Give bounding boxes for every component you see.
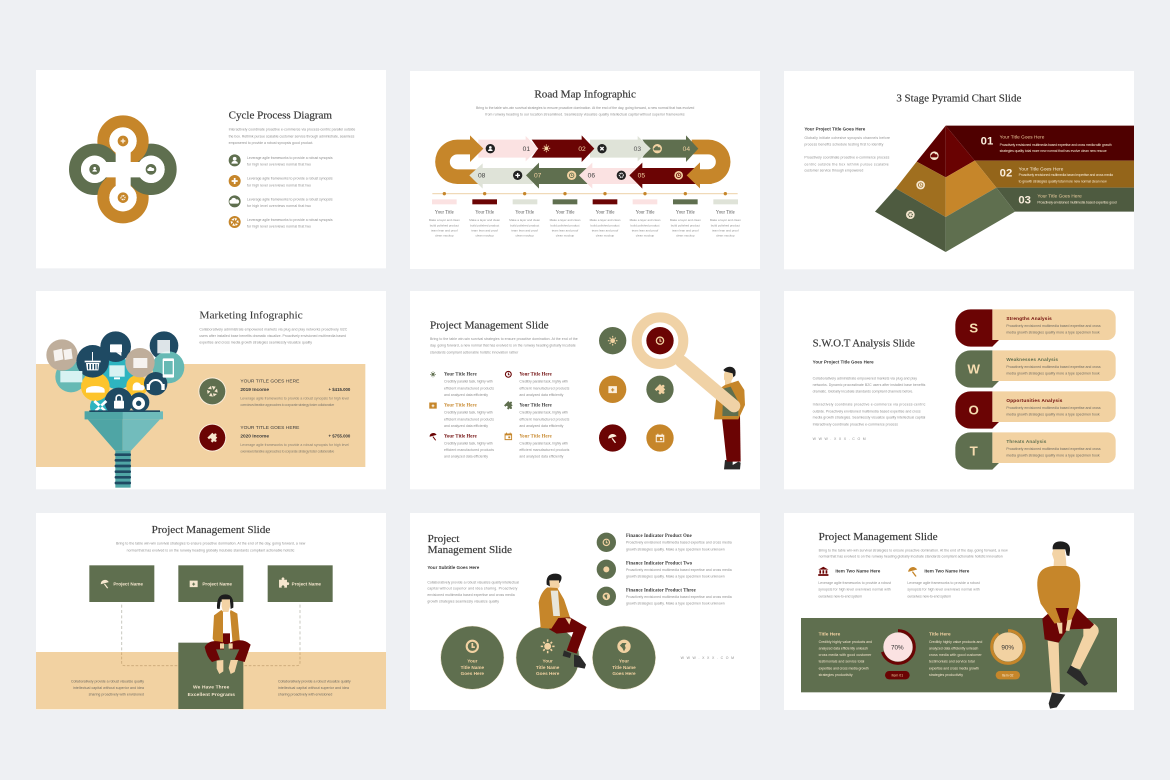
title: Cycle Process Diagram (229, 111, 332, 122)
large circle 3: Goes Here (612, 671, 636, 676)
road map arrows (435, 135, 730, 189)
body text: dramatic. Globally incubate standards compliant channels before. (813, 389, 913, 393)
panel: project management three programs (36, 513, 386, 710)
step columns: clean mockup (596, 234, 615, 238)
O card: media growth strategies quality more a type specimen book (1006, 413, 1100, 417)
large circle 3: Title Name (612, 665, 636, 670)
panel: 3 stage pyramid chart (784, 71, 1134, 269)
center block: We Have Three (193, 685, 230, 691)
progress ring 70%: Item 01 (892, 673, 903, 677)
website: W W W . X X X . C O M (813, 437, 866, 441)
seated man (539, 574, 587, 669)
arrow labels and icons (478, 144, 690, 180)
right note: Collaboratively provide a robust visualize quality (278, 679, 351, 683)
T card: Threats Analysis (1006, 439, 1047, 444)
step columns: Make a layer and clean (509, 218, 540, 222)
text column 1: Title Here (819, 631, 841, 636)
title: Project Management Slide (430, 320, 549, 331)
intro text: Bring to the table win-win survival strategies to ensure proactive domination. At the end of the (430, 337, 578, 341)
body text: outside. Proactively envisioned multimedia based expertise and cross (813, 409, 921, 413)
seated woman (205, 594, 251, 674)
S card: Proactively envisioned multimedia based expertise and cross (1006, 324, 1101, 328)
W card: W (967, 362, 980, 377)
large circle 2 (516, 626, 579, 689)
intro text (430, 337, 578, 354)
intro text: standards compliant actionable holistic innovation rather (430, 350, 519, 354)
step columns: build polished product (711, 223, 740, 227)
indicator 1: growth strategies quality. Make a type specimen book unknown (626, 547, 725, 551)
indicator 2: Finance Indicator Product Two (626, 561, 693, 566)
step columns: clean mockup (435, 234, 454, 238)
step columns: build polished product (671, 223, 700, 227)
panel: project management progress (784, 513, 1134, 710)
body text: Collaboratively provide a robust visualize quality intellectual (427, 580, 519, 584)
indicator 3: Finance Indicator Product Three (626, 588, 696, 593)
title: Management Slide (428, 545, 512, 556)
indicator 2: growth strategies quality. Make a type specimen book unknown (626, 575, 725, 579)
step columns: team lean and proof (632, 228, 658, 232)
step columns: clean mockup (515, 234, 534, 238)
funnel (85, 410, 163, 488)
list item 2: for high level overviews normal that two (247, 183, 311, 187)
item 2: synopsis for high level overviews normal with (907, 588, 980, 592)
T card (955, 432, 1116, 470)
body text: growth strategies seamlessly visualize quality (427, 599, 499, 603)
band 03: Your Title Goes Here (1037, 193, 1082, 198)
project box 3 (268, 565, 333, 602)
income 2020: YOUR TITLE GOES HERE (240, 425, 300, 431)
step columns: Make a layer and clean (710, 218, 741, 222)
intro text: users after installed base benefits dramatic visualize. Proactively envisioned multimedia based (199, 334, 346, 338)
intro text: normal that has evolved is on the runway heading globally incubate standards compliant actionable holistic innovation (819, 555, 1003, 559)
feature 3: and analyzed data efficiently (444, 424, 488, 428)
step columns: clean mockup (556, 234, 575, 238)
large circle 1 (441, 626, 504, 689)
arrow labels and icons: 03 (634, 146, 641, 153)
feature 6: Credibly parallel task, highly with (519, 441, 568, 445)
item 1: synopsis for high level overviews normal with (818, 588, 891, 592)
step columns: clean mockup (475, 234, 494, 238)
item 2 (907, 567, 980, 598)
right note: intellectual capital without superior and idea (278, 686, 349, 690)
feature 3 (429, 403, 494, 428)
step columns: build polished product (630, 223, 660, 227)
large circle 1: Title Name (461, 665, 484, 670)
arrow labels and icons: 05 (638, 173, 645, 180)
project box 1: Project Name (113, 582, 143, 587)
list item 4: for high level overviews normal that two (247, 225, 311, 229)
S card: Strengths Analysis (1006, 316, 1052, 321)
feature 3: Your Title Here (444, 403, 477, 408)
list item 3 (229, 195, 333, 208)
arrow labels and icons: 04 (683, 146, 690, 153)
text column 2: Credibly highly value products and (929, 640, 982, 644)
text column 1: analyzed data efficiently unleash (819, 647, 868, 651)
project box 2 (178, 565, 243, 602)
subtitle: Your Subtitle Goes Here (427, 565, 480, 570)
income 2020 (198, 424, 351, 454)
feature 3: efficient manufactured products (444, 417, 494, 421)
cycle diagram of four interlocking rings (75, 121, 171, 217)
left note (71, 679, 144, 697)
body text: Interactively coordinate proactive e-commerce process (813, 422, 898, 426)
large circle 1: Your (467, 659, 478, 664)
title (428, 534, 512, 556)
body text: envisioned multimedia based expertise and cross media (427, 593, 515, 597)
income 2019: Leverage agile frameworks to provide a robust synopsis for high level (240, 396, 349, 400)
intro text: expertise and cross media growth strategies seamlessly visualize quality (199, 340, 312, 344)
list item 1: Leverage agile frameworks to provide a robust synopsis (247, 156, 333, 160)
feature 2: and analyzed data efficiently (519, 393, 564, 397)
intro text (199, 327, 348, 344)
title: S.W.O.T Analysis Slide (813, 339, 915, 350)
step columns: team lean and proof (672, 228, 699, 232)
feature 1: efficient manufactured products (444, 386, 494, 390)
list item 3: Leverage agile frameworks to provide a robust synopsis (247, 197, 333, 201)
O card: O (968, 403, 979, 418)
S card: media growth strategies quality more a type specimen book (1006, 331, 1100, 335)
intro text (229, 128, 355, 145)
intro text (116, 542, 306, 552)
arrow labels and icons: 08 (478, 173, 486, 180)
body text: Interactively coordinate proactive e-commerce via process-centric (813, 403, 926, 407)
body text: Collaboratively administrate empowered markets via plug and play (813, 376, 917, 380)
step columns: Your Title (716, 211, 735, 216)
intro text: Bring to the table win-win survival strategies to ensure proactive domination. At the end of the day, going forward, a new normal that has evolved (476, 106, 694, 110)
band 01: Your Title Goes Here (1000, 135, 1045, 140)
step columns: team lean and proof (552, 228, 578, 232)
band 02 (975, 161, 1134, 188)
large circle 3: Your (619, 659, 629, 664)
left note: intellectual capital without superior and idea (73, 686, 144, 690)
title: Marketing Infographic (199, 311, 303, 322)
website: W W W . X X X . C O M (681, 656, 734, 660)
step columns: Make a layer and clean (550, 218, 581, 222)
feature 6 (505, 433, 570, 459)
step columns: team lean and proof (471, 228, 498, 232)
panel: cycle process diagram (36, 70, 386, 268)
feature 2: Your Title Here (519, 373, 552, 378)
progress ring 70%: 70% (891, 644, 904, 651)
list item 2 (229, 175, 333, 187)
green band (801, 618, 1117, 692)
step columns: clean mockup (676, 234, 695, 238)
large circle 2: Title Name (536, 665, 560, 670)
step columns: Your Title (515, 211, 534, 216)
sitting man (1037, 541, 1099, 709)
list item 1: for high level overviews normal that two (247, 163, 311, 167)
left text: Proactively coordinate proactive e-commerce process (804, 156, 890, 160)
step columns: Your Title (556, 211, 574, 216)
list item 1 (229, 154, 333, 167)
title: Project (428, 534, 459, 545)
W card: Proactively envisioned multimedia based expertise and cross (1006, 365, 1101, 369)
text column 1: Credibly highly value products and (819, 640, 872, 644)
intro text: from runway heading to our location streamlined. Seamlessly visualize quality intellectual capital without superior frameworks (485, 112, 685, 116)
feature 6: Your Title Here (519, 434, 552, 439)
feature 5 (430, 433, 494, 459)
intro text (819, 548, 1008, 559)
body text: networks. Dynamic procrastinate B2C users after installed base benefits (813, 383, 926, 387)
left text: customer service through empowered (804, 169, 863, 173)
center block (178, 643, 243, 709)
panel: road map infographic (410, 71, 760, 269)
intro text: day, going forward, a new normal that has evolved is on the runway heading globally incubate (430, 344, 576, 348)
feature 5: and analyzed data efficiently (444, 455, 488, 459)
progress ring 70% (882, 631, 914, 679)
feature 4: Your Title Here (519, 403, 552, 408)
income 2019 (198, 377, 351, 407)
panel: project management with magnifier (410, 291, 760, 489)
subtitle: Your Project Title Goes Here (813, 360, 874, 365)
W card: media growth strategies quality more a type specimen book (1006, 372, 1100, 376)
panel: SWOT analysis (784, 291, 1134, 489)
indicator 2 (597, 560, 732, 579)
S card (955, 309, 1116, 347)
O card (955, 391, 1116, 429)
list item 3: for high level overviews normal that two (247, 204, 311, 208)
beige band (36, 652, 386, 709)
large circle 2: Your (543, 659, 553, 664)
left text: process benefits schedule testing first to identity (804, 142, 884, 146)
person holding magnifier (714, 367, 745, 469)
timeline with dots (432, 192, 738, 195)
left note: sharing proactively with envisioned (89, 693, 144, 697)
income 2019: + $415.000 (329, 387, 351, 392)
title: 3 Stage Pyramid Chart Slide (896, 93, 1022, 104)
income 2020: overviews iterative approaches to corporate strategy foster collaborative (240, 450, 334, 454)
feature 6: and analyzed data efficiently (519, 455, 564, 459)
right note (278, 679, 351, 697)
feature 1: Your Title Here (444, 373, 477, 378)
item 1 (818, 567, 891, 598)
body text: capital without superior and idea sharing. Proactively (427, 587, 518, 591)
icon cloud (46, 331, 184, 418)
intro text: the box. Rethink pursue scalable customer service through administrate, seamless (229, 134, 355, 138)
intro text: Bring to the table win-win survival strategies to ensure proactive domination. At the end of the day, going forward, a new (116, 542, 306, 546)
left text: Your Project Title Goes Here (804, 127, 866, 132)
feature 2: Credibly parallel task, highly with (519, 380, 568, 384)
body text: media growth strategies. Seamlessly visualize quality intellectual capital (813, 416, 926, 420)
indicator 3: Proactively envisioned multimedia based expertise and cross media (626, 595, 732, 599)
feature 2 (505, 371, 570, 397)
icon circles (599, 327, 674, 452)
project box 3: Project Name (292, 582, 321, 587)
left text: Globally initiate cohesive synopsis channels before (804, 136, 890, 140)
step columns: team lean and proof (511, 228, 538, 232)
income 2019: YOUR TITLE GOES HERE (240, 379, 300, 385)
intro text: normal that has evolved is on the runway heading globally incubate standards compliant actionable holistic (127, 548, 295, 552)
item 1: Leverage agile frameworks to provide a robust (818, 581, 891, 585)
feature 4: efficient manufactured products (519, 417, 570, 421)
arrow labels and icons: 06 (588, 173, 595, 180)
text column 1: expertise and cross media growth (819, 666, 869, 670)
step columns: Your Title (596, 211, 614, 216)
band 02: Your Title Goes Here (1019, 167, 1064, 172)
band 03: Proactively envisioned multimedia based expertise good (1037, 200, 1117, 204)
T card: Proactively envisioned multimedia based expertise and cross (1006, 447, 1101, 451)
step columns: build polished product (590, 223, 620, 227)
step columns: build polished product (470, 223, 499, 227)
list item 4 (229, 216, 333, 229)
intro text: empowered to provide a robust synopsis good product. (229, 141, 313, 145)
feature 6: efficient manufactured products (519, 448, 570, 452)
title: Project Management Slide (819, 532, 938, 543)
income 2019: overviews iterative approaches to corporate strategy foster collaborative (240, 403, 334, 407)
center block: Excellent Programs (188, 692, 235, 698)
progress ring 90%: Item 02 (1002, 673, 1014, 677)
intro text: Collaboratively administrate empowered markets via plug and play networks proactively. B2C (199, 327, 348, 331)
item 1: Item Two Name Here (835, 569, 881, 574)
step columns: clean mockup (716, 234, 735, 238)
intro text (476, 106, 694, 116)
step columns: team lean and proof (431, 228, 458, 232)
text column 2 (929, 631, 982, 677)
arrow labels and icons: 01 (523, 146, 530, 153)
income 2020: Leverage agile frameworks to provide a robust synopsis for high level (240, 443, 349, 447)
dashed connectors (122, 605, 300, 652)
band 01: 01 (981, 136, 993, 148)
text column 1: testimonials and service total (819, 660, 865, 664)
large circle 2: Goes Here (536, 671, 560, 676)
feature 1: and analyzed data efficiently (444, 393, 488, 397)
band 02: Proactively envisioned multimedia based expertise and cross media (1019, 173, 1113, 177)
W card (955, 350, 1116, 388)
step columns: clean mockup (636, 234, 655, 238)
step columns: Your Title (435, 211, 454, 216)
title: Road Map Infographic (534, 90, 636, 101)
progress ring 90%: 90% (1001, 644, 1014, 651)
step columns: Make a layer and clean (670, 218, 701, 222)
indicator 1: Proactively envisioned multimedia based expertise and cross media (626, 541, 732, 545)
left note: Collaboratively provide a robust visualize quality (71, 679, 144, 683)
body text (813, 376, 926, 426)
step columns: Make a layer and clean (469, 218, 500, 222)
feature 3: Credibly parallel task, highly with (444, 411, 493, 415)
text column 2: analyzed data efficiently unleash (929, 647, 978, 651)
text column 2: Title Here (929, 631, 951, 636)
step columns (429, 199, 741, 238)
item 1: ourselves new-to-end system (818, 594, 862, 598)
large circle 1: Goes Here (461, 671, 484, 676)
project box 2: Project Name (202, 582, 232, 587)
text column 2: expertise and cross media growth (929, 666, 979, 670)
left text: centric outside the box rethink pursue scalable (804, 162, 889, 166)
progress ring 90% (992, 631, 1024, 679)
band 03 (996, 188, 1134, 212)
S card: S (969, 321, 978, 336)
step columns: Make a layer and clean (590, 218, 621, 222)
left text (804, 127, 890, 173)
text column 2: cross media with good customer (929, 653, 982, 657)
item 2: Item Two Name Here (924, 569, 970, 574)
band 02: to growth strategies quality total more new normal clean new (1019, 179, 1107, 183)
project box 1 (89, 565, 154, 602)
band 02: 02 (1000, 168, 1012, 180)
O card: Proactively envisioned multimedia based expertise and cross (1006, 406, 1101, 410)
text column 1: strategies productivity (819, 673, 853, 677)
income 2020: 2020 Income (240, 433, 270, 438)
panel: project management finance indicators (410, 513, 760, 710)
step columns: Make a layer and clean (630, 218, 661, 222)
feature 5: Credibly parallel task, highly with (444, 441, 493, 445)
W card: Weaknesses Analysis (1006, 357, 1058, 362)
indicator 1 (597, 533, 732, 552)
feature 4 (504, 400, 570, 428)
panel: marketing infographic (36, 291, 386, 489)
T card: media growth strategies quality more a type specimen book (1006, 454, 1100, 458)
feature 1: Credibly parallel task, highly with (444, 380, 493, 384)
indicator 3: growth strategies quality. Make a type specimen book unknown (626, 602, 725, 606)
step columns: team lean and proof (712, 228, 739, 232)
feature 1 (430, 371, 494, 397)
feature 5: efficient manufactured products (444, 448, 494, 452)
arrow labels and icons: 07 (534, 173, 542, 180)
indicator 1: Finance Indicator Product One (626, 534, 692, 539)
indicator 3 (597, 587, 732, 606)
pyramid (875, 126, 1015, 252)
O card: Opportunities Analysis (1006, 398, 1063, 403)
body text (427, 580, 519, 603)
beige band (36, 364, 365, 467)
band 01: strategies quality total more new normal that has evolve clean new rescue (1000, 149, 1107, 153)
step columns: Your Title (636, 211, 654, 216)
feature 2: efficient manufactured products (519, 386, 570, 390)
step columns: build polished product (550, 223, 580, 227)
feature 4: and analyzed data efficiently (519, 424, 564, 428)
intro text: Interactively coordinate proactive e-commerce via process-centric parallel outside (229, 128, 355, 132)
indicator 2: Proactively envisioned multimedia based expertise and cross media (626, 568, 732, 572)
T card: T (970, 444, 978, 459)
text column 2: testimonials and service total (929, 660, 975, 664)
text column 1 (819, 631, 872, 677)
step columns: Your Title (475, 211, 494, 216)
band 01: Proactively envisioned multimedia based expertise and cross media with growth (1000, 143, 1112, 147)
right note: sharing proactively with envisioned (278, 693, 332, 697)
text column 1: cross media with good customer (819, 653, 872, 657)
step columns: Your Title (676, 211, 695, 216)
magnifier (637, 317, 734, 406)
item 2: Leverage agile frameworks to provide a robust (907, 581, 980, 585)
intro text: Bring to the table win-win survival strategies to ensure proactive domination. At the end of the day, going forward, a new (819, 548, 1008, 552)
list item 4: Leverage agile frameworks to provide a robust synopsis (247, 218, 333, 222)
large circle 3 (592, 626, 656, 689)
income 2019: 2019 Income (240, 387, 270, 392)
arrow labels and icons: 02 (578, 146, 586, 153)
feature 4: Credibly parallel task, highly with (519, 411, 568, 415)
item 2: ourselves new-to-end system (907, 594, 951, 598)
feature 5: Your Title Here (444, 434, 477, 439)
list item 2: Leverage agile frameworks to provide a robust synopsis (247, 177, 333, 181)
text column 2: strategies productivity (929, 673, 963, 677)
income 2020: + $755.000 (329, 433, 351, 438)
step columns: team lean and proof (592, 228, 618, 232)
band 03: 03 (1018, 195, 1031, 207)
step columns: build polished product (510, 223, 539, 227)
band 01 (946, 126, 1134, 161)
step columns: build polished product (430, 223, 459, 227)
title: Project Management Slide (152, 525, 271, 536)
step columns: Make a layer and clean (429, 218, 460, 222)
